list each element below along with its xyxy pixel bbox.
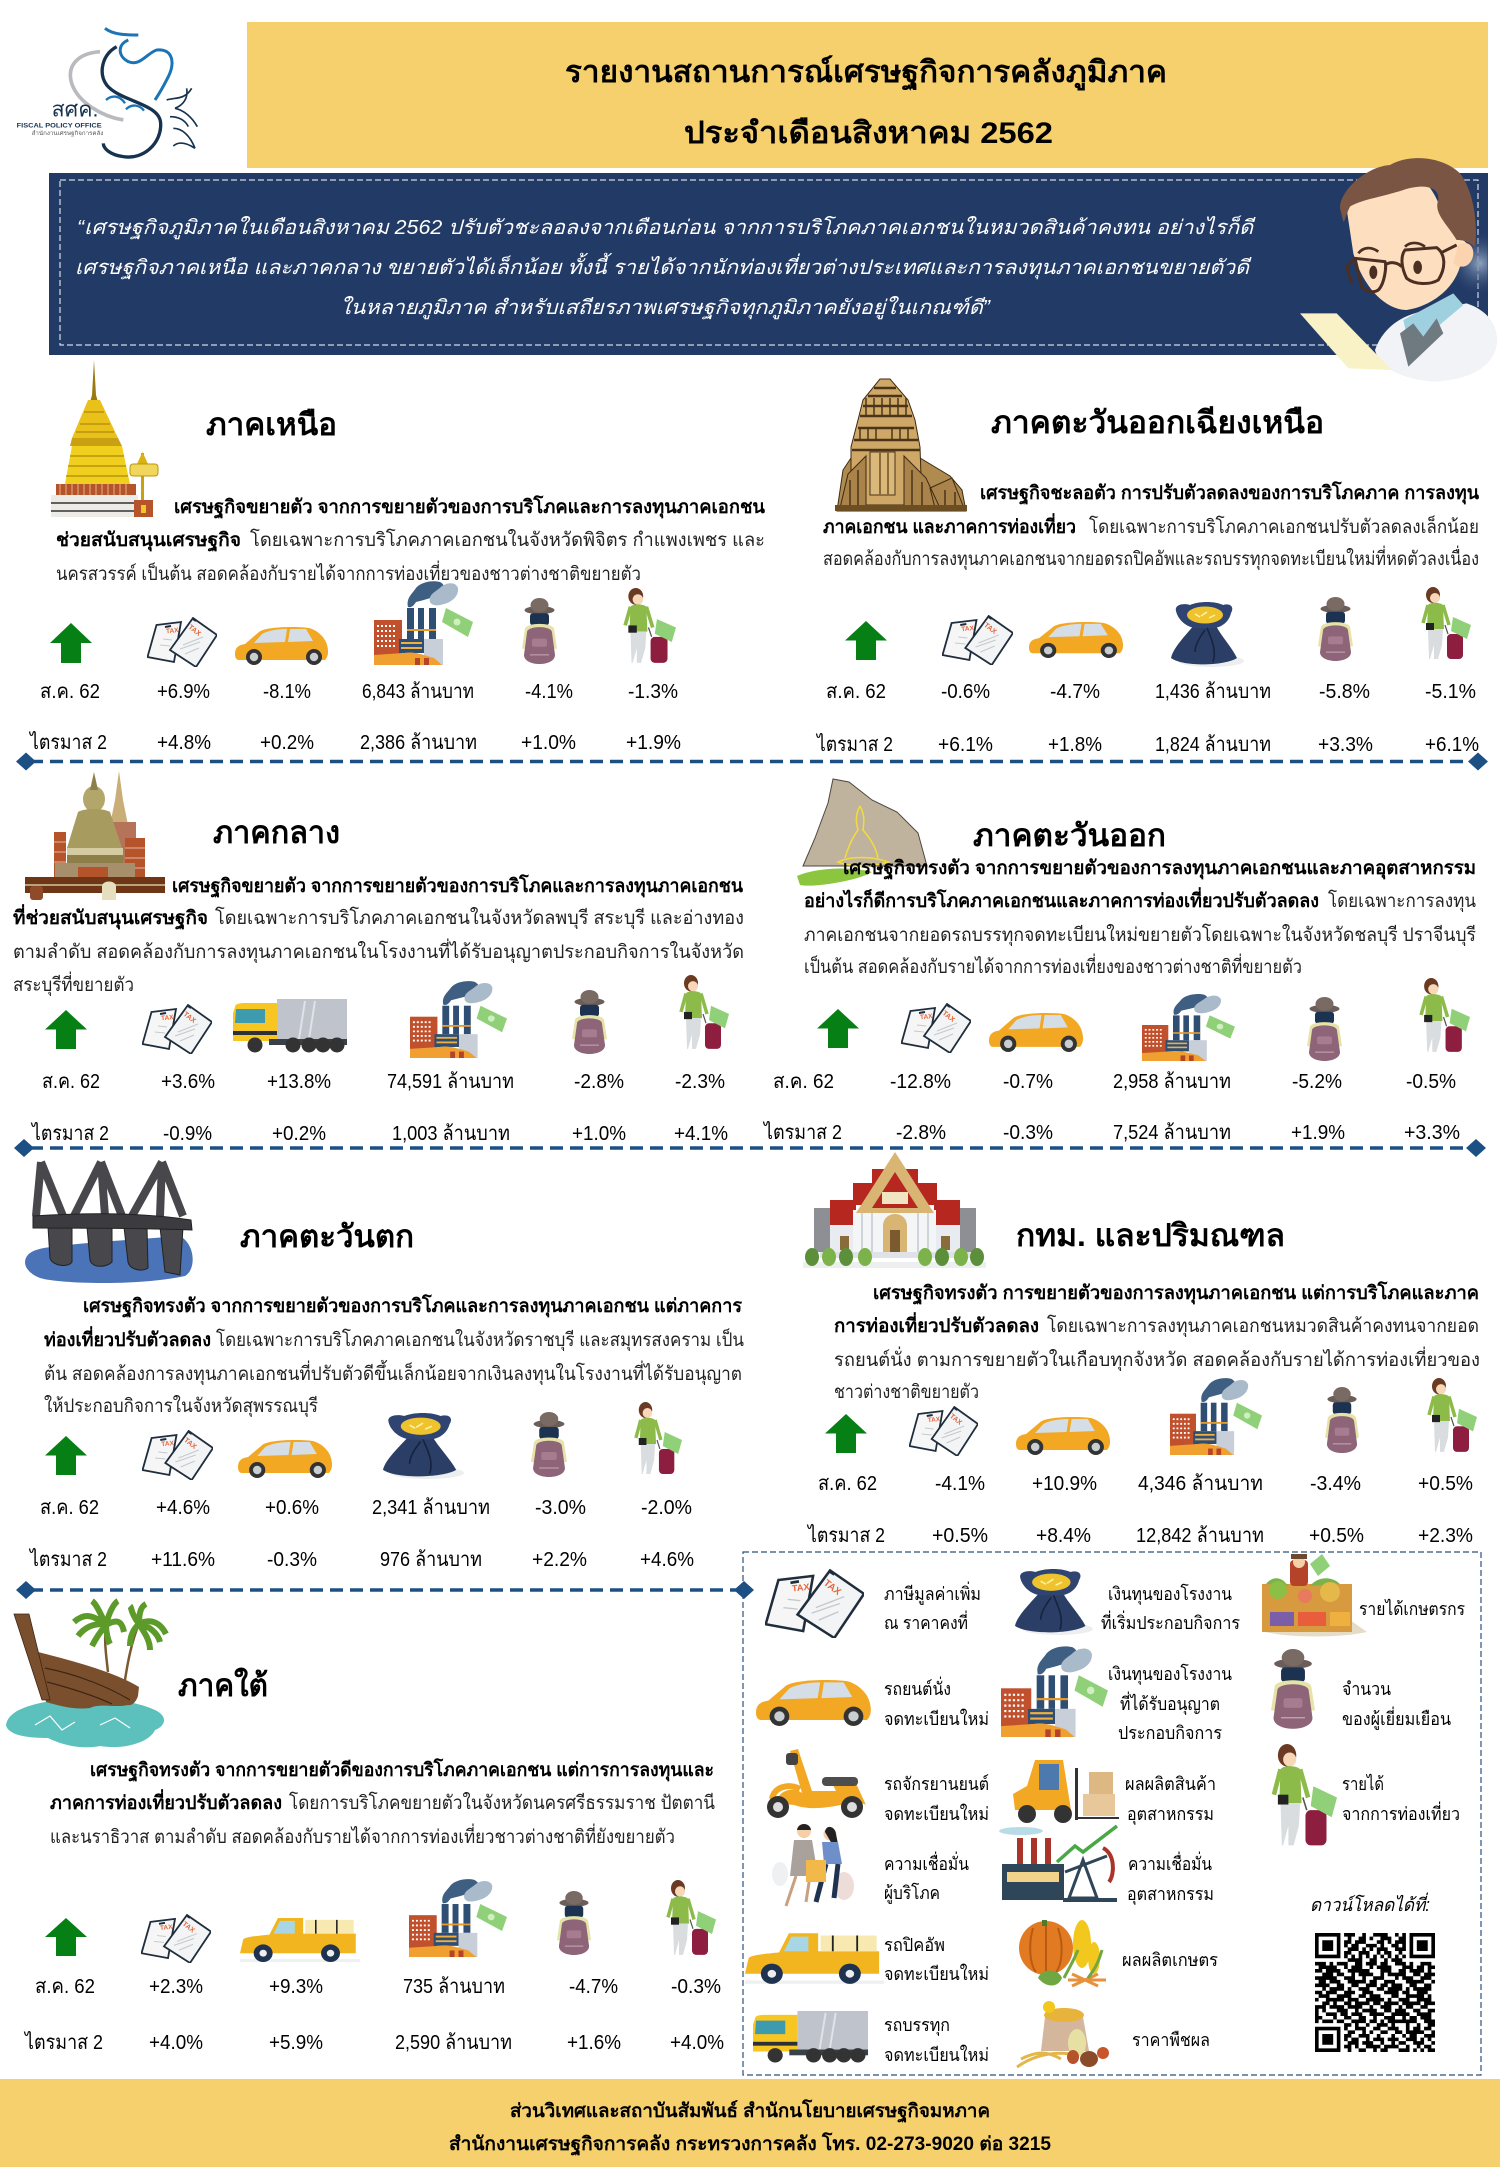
QR code bbox=[1315, 1935, 1435, 2050]
icon: up arrow bbox=[845, 621, 887, 660]
icon: VAT bbox=[943, 616, 1013, 665]
row: August: 74,591 ล้านบาท bbox=[387, 1071, 514, 1093]
icon: tourism income bbox=[681, 975, 729, 1049]
text block: ต้น สอดคล้องการลงทุนภาคเอกชนที่ปรับตัวดีขึ้นเล็กน้อยจากเงินลงทุนในโรงงานที่ได้รับอนุญาต bbox=[44, 1360, 742, 1386]
row: Q2: -0.9% bbox=[163, 1123, 212, 1145]
illustration: Buddha rock hill bbox=[797, 779, 927, 886]
title banner: ประจำเดือนสิงหาคม 2562 bbox=[684, 117, 1053, 150]
row: Q2: +0.5% bbox=[1309, 1525, 1364, 1547]
legend item: consumer confidence: ความเชื่อมั่น bbox=[884, 1851, 969, 1874]
panel: Bangkok and vicinity bbox=[803, 1152, 1480, 1547]
text block bbox=[13, 874, 744, 997]
row: Q2: ไตรมาส 2 bbox=[28, 731, 107, 754]
icon: pickup bbox=[240, 1918, 360, 1962]
row: Q2: 2,590 ล้านบาท bbox=[395, 2032, 512, 2054]
row: Q2 bbox=[30, 1122, 728, 1145]
legend item: truck: จดทะเบียนใหม่ bbox=[884, 2044, 989, 2065]
row: Q2: +1.9% bbox=[1291, 1122, 1345, 1144]
row: August bbox=[40, 681, 678, 703]
row: August: -4.1% bbox=[935, 1473, 985, 1495]
row: Q2: +8.4% bbox=[1036, 1525, 1091, 1547]
text block: ที่ช่วยสนับสนุนเศรษฐกิจ bbox=[13, 904, 208, 931]
legend item: farm income: รายได้เกษตรกร bbox=[1359, 1598, 1465, 1619]
row: August: -0.7% bbox=[1003, 1071, 1053, 1093]
row: August: +9.3% bbox=[269, 1976, 323, 1998]
icon: visitor bbox=[1307, 997, 1342, 1061]
icon: passenger car bbox=[238, 1440, 332, 1478]
text block: ชาวต่างชาติขยายตัว bbox=[834, 1382, 979, 1403]
footer: ส่วนวิเทศและสถาบันสัมพันธ์ สำนักนโยบายเศรษฐกิจมหภาค bbox=[510, 2099, 990, 2124]
row: August: -5.2% bbox=[1292, 1071, 1342, 1093]
row: Q2: 1,003 ล้านบาท bbox=[392, 1123, 510, 1145]
icon: factory bbox=[1142, 994, 1235, 1061]
row: August: -8.1% bbox=[263, 681, 311, 703]
text block: ให้ประกอบกิจการในจังหวัดสุพรรณบุรี bbox=[44, 1395, 318, 1418]
legend item: industrial output: ผลผลิตสินค้า bbox=[1125, 1774, 1216, 1794]
row: August bbox=[40, 1497, 692, 1519]
row: Q2: ไตรมาส 2 bbox=[30, 1122, 109, 1145]
panel: West bbox=[25, 1162, 744, 1571]
text block: อย่างไรก็ดีการบริโภคภาคเอกชนและภาคการท่องเที่ยวปรับตัวลดลง bbox=[804, 887, 1319, 912]
text block: ช่วยสนับสนุนเศรษฐกิจ bbox=[56, 530, 241, 553]
icon: up arrow bbox=[45, 1010, 87, 1049]
panel: summary quote: ในหลายภูมิภาค สำหรับเสถียรภาพเศรษฐกิจทุกภูมิภาคยังอยู่ในเกณฑ์ดี” bbox=[340, 296, 991, 320]
legend item: agricultural output: ผลผลิตเกษตร bbox=[1122, 1950, 1218, 1970]
icon: tourism income bbox=[1429, 1378, 1477, 1452]
text block: เศรษฐกิจทรงตัว จากการขยายตัวของการบริโภคและการลงทุนภาคเอกชน แต่ภาคการ bbox=[83, 1294, 743, 1319]
row: August: ส.ค. 62 bbox=[42, 1071, 100, 1093]
row: August: ส.ค. 62 bbox=[773, 1071, 834, 1093]
legend item: capital of started factories bbox=[1015, 1569, 1240, 1635]
row: August bbox=[773, 1071, 1456, 1093]
legend item: passenger car bbox=[756, 1676, 989, 1729]
legend item: industrial output bbox=[1013, 1760, 1216, 1825]
icon: money bag bbox=[1171, 602, 1244, 667]
row: August bbox=[826, 681, 1476, 703]
heading: ภาคกลาง bbox=[213, 815, 340, 850]
legend item: visitors bbox=[1271, 1649, 1451, 1730]
icon: passenger car bbox=[989, 1013, 1083, 1052]
row: Q2 bbox=[806, 1524, 1473, 1547]
text block: โดยเฉพาะการลงทุน bbox=[1328, 889, 1476, 913]
title banner bbox=[247, 22, 1488, 168]
text block bbox=[834, 1281, 1480, 1403]
icon: tourism income bbox=[1421, 978, 1470, 1052]
row: August: +3.6% bbox=[161, 1071, 215, 1093]
row: Q2: +0.2% bbox=[272, 1123, 326, 1145]
row: Q2: +4.0% bbox=[670, 2032, 724, 2054]
row: Q2: ไตรมาส 2 bbox=[28, 1548, 107, 1571]
row: Q2: 1,824 ล้านบาท bbox=[1155, 734, 1271, 756]
row: August: -4.7% bbox=[1050, 681, 1100, 703]
icon: passenger car bbox=[1029, 622, 1123, 658]
legend item: industrial output: อุตสาหกรรม bbox=[1127, 1804, 1214, 1825]
row: Q2: +3.3% bbox=[1404, 1122, 1460, 1144]
download label: ดาวน์โหลดได้ที่: bbox=[1310, 1892, 1430, 1915]
icon: visitor bbox=[531, 1412, 567, 1477]
illustration: doctor reading bbox=[1300, 158, 1500, 382]
heading: ภาคตะวันออกเฉียงเหนือ bbox=[991, 405, 1324, 440]
icon: truck bbox=[233, 999, 347, 1052]
row: August: -3.4% bbox=[1310, 1473, 1361, 1495]
row: Q2: +1.6% bbox=[567, 2032, 621, 2054]
legend item: passenger car: รถยนต์นั่ง bbox=[884, 1676, 951, 1699]
text block: โดยเฉพาะการบริโภคภาคเอกชนในจังหวัดลพบุรี สระบุรี และอ่างทอง bbox=[215, 906, 744, 930]
panel: legend bbox=[743, 1552, 1481, 2075]
legend item: tourism income: รายได้ bbox=[1342, 1773, 1384, 1794]
row: Q2 bbox=[762, 1121, 1460, 1144]
text block: ภาคการท่องเที่ยวปรับตัวลดลง bbox=[50, 1789, 282, 1814]
row: Q2: 976 ล้านบาท bbox=[380, 1549, 482, 1571]
text block: โดยเฉพาะการบริโภคภาคเอกชนในจังหวัดราชบุรี และสมุทรสงคราม เป็น bbox=[216, 1327, 744, 1352]
text block: เศรษฐกิจขยายตัว จากการขยายตัวของการบริโภคและการลงทุนภาคเอกชน bbox=[172, 874, 743, 899]
legend item: VAT: ภาษีมูลค่าเพิ่ม bbox=[884, 1581, 981, 1605]
row: August: -1.3% bbox=[628, 681, 678, 703]
row: Q2: -2.8% bbox=[896, 1122, 946, 1144]
text block bbox=[50, 1758, 715, 1848]
row: August: ส.ค. 62 bbox=[826, 681, 886, 703]
text block: เศรษฐกิจทรงตัว จากการขยายตัวของการลงทุนภาคเอกชนและภาคอุตสาหกรรม bbox=[843, 858, 1476, 881]
row: Q2: 2,386 ล้านบาท bbox=[360, 732, 477, 754]
row: Q2: 7,524 ล้านบาท bbox=[1113, 1122, 1231, 1144]
legend item: visitors: จำนวน bbox=[1342, 1679, 1391, 1699]
logo: Fiscal Policy Office: สศค. bbox=[52, 98, 98, 122]
legend item: visitors: ของผู้เยี่ยมเยือน bbox=[1342, 1706, 1451, 1730]
icon: factory bbox=[410, 981, 507, 1058]
panel: summary quote: เศรษฐกิจภาคเหนือ และภาคกลาง ขยายตัวได้เล็กน้อย ทั้งนี้ รายได้จากนักท่องเที่ยวต่างประเทศและการลงทุนภาคเอกชนขยายตัวดี bbox=[75, 252, 1252, 280]
illustration: golden chedi bbox=[51, 360, 158, 517]
legend item: passenger car: จดทะเบียนใหม่ bbox=[884, 1708, 989, 1729]
legend item: consumer confidence: ผู้บริโภค bbox=[884, 1882, 940, 1904]
row: August: +0.6% bbox=[265, 1497, 319, 1519]
legend item: motorcycle: รถจักรยานยนต์ bbox=[884, 1774, 989, 1794]
heading: ภาคใต้ bbox=[178, 1667, 268, 1703]
text block: โดยการบริโภคขยายตัวในจังหวัดนครศรีธรรมราช ปัตตานี bbox=[289, 1791, 715, 1814]
icon: VAT bbox=[148, 618, 217, 667]
icon: VAT bbox=[142, 1915, 211, 1963]
legend item: farm income bbox=[1262, 1554, 1465, 1636]
legend item: VAT bbox=[766, 1570, 981, 1638]
text block: รถยนต์นั่ง ตามการขยายตัวในเกือบทุกจังหวัด สอดคล้องกับรายได้การท่องเที่ยวของ bbox=[834, 1346, 1480, 1372]
row: August: -2.0% bbox=[641, 1497, 692, 1519]
text block: เป็นต้น สอดคล้องกับรายได้จากการท่องเที่ยงของชาวต่างชาติที่ขยายตัว bbox=[804, 953, 1302, 978]
icon: up arrow bbox=[825, 1414, 867, 1453]
row: August: +2.3% bbox=[149, 1976, 203, 1998]
logo: Fiscal Policy Office bbox=[17, 28, 197, 157]
text block: เศรษฐกิจทรงตัว จากการขยายตัวดีของการบริโภคภาคเอกชน แต่การการลงทุนและ bbox=[90, 1758, 714, 1783]
row: Q2: 12,842 ล้านบาท bbox=[1136, 1525, 1264, 1547]
footer: สำนักงานเศรษฐกิจการคลัง กระทรวงการคลัง โทร. 02-273-9020 ต่อ 3215 bbox=[449, 2132, 1051, 2157]
row: Q2: +1.0% bbox=[521, 732, 576, 754]
icon: VAT bbox=[142, 1005, 212, 1054]
illustration: victory monument bbox=[835, 379, 967, 511]
text block bbox=[823, 481, 1479, 571]
row: August: -0.5% bbox=[1406, 1071, 1456, 1093]
illustration: Buddha and ruins bbox=[25, 771, 165, 900]
icon: VAT bbox=[143, 1431, 213, 1480]
row: Q2: +0.2% bbox=[260, 732, 314, 754]
text block: การท่องเที่ยวปรับตัวลดลง bbox=[834, 1312, 1039, 1337]
row: Q2: +5.9% bbox=[269, 2032, 323, 2054]
text block: เศรษฐกิจขยายตัว จากการขยายตัวของการบริโภคและการลงทุนภาคเอกชน bbox=[174, 495, 765, 520]
icon: tourism income bbox=[668, 1880, 716, 1955]
panel: North bbox=[28, 360, 765, 754]
icon: money bag bbox=[383, 1413, 464, 1479]
icon: up arrow bbox=[45, 1918, 87, 1956]
icon: visitor bbox=[557, 1891, 591, 1955]
icon: tourism income bbox=[1423, 587, 1471, 659]
text block: นครสวรรค์ เป็นต้น สอดคล้องกับรายได้จากการท่องเที่ยวของชาวต่างชาติขยายตัว bbox=[56, 560, 641, 585]
row: Q2 bbox=[815, 733, 1479, 756]
row: August: -5.1% bbox=[1425, 681, 1476, 703]
legend item: pickup: รถปิคอัพ bbox=[884, 1935, 945, 1955]
row: Q2 bbox=[28, 1548, 694, 1571]
row: Q2 bbox=[28, 731, 681, 754]
text block: โดยเฉพาะการบริโภคภาคเอกชนในจังหวัดพิจิตร กำแพงเพชร และ bbox=[250, 528, 765, 551]
legend item: truck bbox=[753, 2011, 989, 2065]
legend item: tourism income: จากการท่องเที่ยว bbox=[1342, 1801, 1460, 1824]
row: Q2: +11.6% bbox=[151, 1549, 215, 1571]
row: August: 6,843 ล้านบาท bbox=[362, 681, 474, 703]
row: August: ส.ค. 62 bbox=[35, 1976, 95, 1998]
illustration: long-tail boat and palms bbox=[6, 1601, 166, 1747]
legend item: industrial confidence: ความเชื่อมั่น bbox=[1128, 1851, 1212, 1874]
panel: summary quote: “เศรษฐกิจภูมิภาคในเดือนสิงหาคม 2562 ปรับตัวชะลอลงจากเดือนก่อน จากการบริโภคภาคเอกชนในหมวดสินค้าคงทน อย่างไรก็ดี bbox=[77, 215, 1256, 240]
icon: up arrow bbox=[45, 1436, 87, 1475]
row: August: -5.8% bbox=[1319, 681, 1370, 703]
legend item: capital of licensed factories: ประกอบกิจการ bbox=[1118, 1723, 1222, 1743]
row: August: 735 ล้านบาท bbox=[403, 1976, 505, 1998]
row: Q2: +4.1% bbox=[674, 1123, 728, 1145]
text block: และนราธิวาส ตามลำดับ สอดคล้องกับรายได้จากการท่องเที่ยวชาวต่างชาติที่ยังขยายตัว bbox=[50, 1823, 675, 1848]
legend item: consumer confidence bbox=[772, 1824, 969, 1906]
heading: ภาคตะวันออก bbox=[973, 818, 1166, 853]
icon: factory bbox=[374, 581, 473, 665]
heading: ภาคเหนือ bbox=[206, 407, 337, 442]
row: August: -4.7% bbox=[569, 1976, 618, 1998]
row: August: +10.9% bbox=[1032, 1473, 1097, 1495]
row: August bbox=[42, 1071, 725, 1093]
logo: Fiscal Policy Office: FISCAL POLICY OFFICE bbox=[17, 123, 102, 129]
icon: factory bbox=[409, 1879, 507, 1957]
row: Q2: +4.6% bbox=[640, 1549, 694, 1571]
row: Q2: ไตรมาส 2 bbox=[815, 733, 893, 756]
row: August: ส.ค. 62 bbox=[818, 1473, 877, 1495]
icon: visitor bbox=[522, 598, 557, 664]
row: August: +6.9% bbox=[157, 681, 210, 703]
row: August bbox=[35, 1976, 721, 1998]
text block: เศรษฐกิจทรงตัว การขยายตัวของการลงทุนภาคเอกชน แต่การบริโภคและภาค bbox=[873, 1281, 1479, 1306]
row: Q2: +1.0% bbox=[572, 1123, 626, 1145]
legend item: truck: รถบรรทุก bbox=[884, 2015, 950, 2036]
row: Q2: +2.3% bbox=[1418, 1525, 1473, 1547]
icon: passenger car bbox=[1016, 1417, 1110, 1455]
legend item: crop prices: ราคาพืชผล bbox=[1132, 2030, 1210, 2050]
row: Q2: +4.8% bbox=[157, 732, 211, 754]
row: Q2: -0.3% bbox=[1003, 1122, 1053, 1144]
row: Q2: ไตรมาส 2 bbox=[23, 2031, 103, 2054]
row: Q2: ไตรมาส 2 bbox=[762, 1121, 842, 1144]
row: Q2: +3.3% bbox=[1318, 734, 1373, 756]
row: Q2: ไตรมาส 2 bbox=[806, 1524, 885, 1547]
legend item: capital of started factories: ที่เริ่มประกอบกิจการ bbox=[1101, 1610, 1240, 1633]
row: August: 2,958 ล้านบาท bbox=[1113, 1071, 1231, 1093]
row: August: ส.ค. 62 bbox=[40, 681, 100, 703]
row: Q2: +1.8% bbox=[1048, 734, 1102, 756]
row: August: -2.3% bbox=[675, 1071, 725, 1093]
row: August: -12.8% bbox=[890, 1071, 951, 1093]
legend item: agricultural output bbox=[1019, 1920, 1218, 1986]
panel: Central bbox=[13, 771, 744, 1145]
heading: ภาคตะวันตก bbox=[240, 1219, 414, 1254]
legend item: industrial confidence bbox=[999, 1826, 1214, 1905]
text block bbox=[44, 1294, 744, 1418]
row: Q2: +6.1% bbox=[938, 734, 993, 756]
row: August: -0.6% bbox=[941, 681, 990, 703]
legend item: tourism income bbox=[1274, 1744, 1460, 1845]
icon: passenger car bbox=[235, 627, 328, 665]
legend item: industrial confidence: อุตสาหกรรม bbox=[1127, 1884, 1214, 1905]
icon: visitor bbox=[572, 990, 607, 1054]
row: August: -3.0% bbox=[535, 1497, 586, 1519]
row: August: 2,341 ล้านบาท bbox=[372, 1497, 490, 1519]
row: August: +4.6% bbox=[156, 1497, 210, 1519]
icon: VAT bbox=[909, 1407, 978, 1456]
legend item: capital of licensed factories: เงินทุนของโรงงาน bbox=[1108, 1663, 1232, 1685]
illustration: marble temple bbox=[803, 1152, 986, 1268]
row: Q2: +4.0% bbox=[149, 2032, 203, 2054]
panel: South bbox=[6, 1601, 724, 2054]
legend item: motorcycle bbox=[767, 1749, 989, 1824]
panel: East bbox=[762, 779, 1476, 1144]
text block: สระบุรีที่ขยายตัว bbox=[13, 971, 134, 997]
legend item: pickup bbox=[745, 1933, 989, 1984]
heading: กทม. และปริมณฑล bbox=[1016, 1218, 1285, 1253]
row: August: -4.1% bbox=[525, 681, 573, 703]
row: Q2 bbox=[23, 2031, 724, 2054]
row: Q2: +6.1% bbox=[1425, 734, 1479, 756]
row: August: -0.3% bbox=[671, 1976, 721, 1998]
row: Q2: +2.2% bbox=[532, 1549, 587, 1571]
row: August: 4,346 ล้านบาท bbox=[1138, 1473, 1263, 1495]
row: August bbox=[818, 1473, 1473, 1495]
footer bbox=[0, 2079, 1500, 2167]
row: August: +0.5% bbox=[1418, 1473, 1473, 1495]
icon: factory bbox=[1170, 1378, 1262, 1455]
icon: up arrow bbox=[50, 623, 92, 663]
row: Q2: -0.3% bbox=[267, 1549, 317, 1571]
panel: Northeast bbox=[815, 379, 1479, 756]
icon: tourism income bbox=[625, 588, 676, 663]
text block bbox=[56, 495, 765, 585]
legend item: motorcycle: จดทะเบียนใหม่ bbox=[884, 1803, 989, 1824]
icon: up arrow bbox=[817, 1009, 859, 1048]
icon: visitor bbox=[1318, 597, 1353, 661]
icon: tourism income bbox=[636, 1402, 682, 1474]
legend item: crop prices bbox=[1017, 2001, 1210, 2067]
legend item: capital of licensed factories bbox=[1001, 1646, 1232, 1743]
logo: Fiscal Policy Office: สำนักงานเศรษฐกิจการคลัง bbox=[32, 130, 104, 137]
title banner: รายงานสถานการณ์เศรษฐกิจการคลังภูมิภาค bbox=[565, 55, 1167, 92]
illustration: River Kwai bridge bbox=[25, 1162, 193, 1283]
icon: visitor bbox=[1325, 1387, 1359, 1453]
text block: ตามลำดับ สอดคล้องกับการลงทุนภาคเอกชนในโรงงานที่ได้รับอนุญาตประกอบกิจการในจังหวัด bbox=[13, 938, 744, 964]
row: August: 1,436 ล้านบาท bbox=[1155, 681, 1271, 703]
text block: เศรษฐกิจชะลอตัว การปรับตัวลดลงของการบริโภคภาค การลงทุน bbox=[980, 481, 1479, 506]
row: August: ส.ค. 62 bbox=[40, 1497, 99, 1519]
icon: VAT bbox=[902, 1004, 971, 1053]
text block: ท่องเที่ยวปรับตัวลดลง bbox=[44, 1326, 211, 1351]
legend item: VAT: ณ ราคาคงที่ bbox=[884, 1610, 968, 1633]
text block: ภาคเอกชน และภาคการท่องเที่ยว bbox=[823, 513, 1076, 538]
row: August: -2.8% bbox=[574, 1071, 624, 1093]
legend item: pickup: จดทะเบียนใหม่ bbox=[884, 1963, 989, 1984]
text block bbox=[804, 858, 1476, 978]
row: August: +13.8% bbox=[267, 1071, 331, 1093]
legend item: capital of started factories: เงินทุนของโรงงาน bbox=[1108, 1583, 1232, 1605]
legend item: capital of licensed factories: ที่ได้รับอนุญาต bbox=[1120, 1691, 1220, 1715]
row: Q2: +1.9% bbox=[626, 732, 681, 754]
row: Q2: +0.5% bbox=[932, 1525, 988, 1547]
panel: summary quote bbox=[49, 173, 1488, 355]
